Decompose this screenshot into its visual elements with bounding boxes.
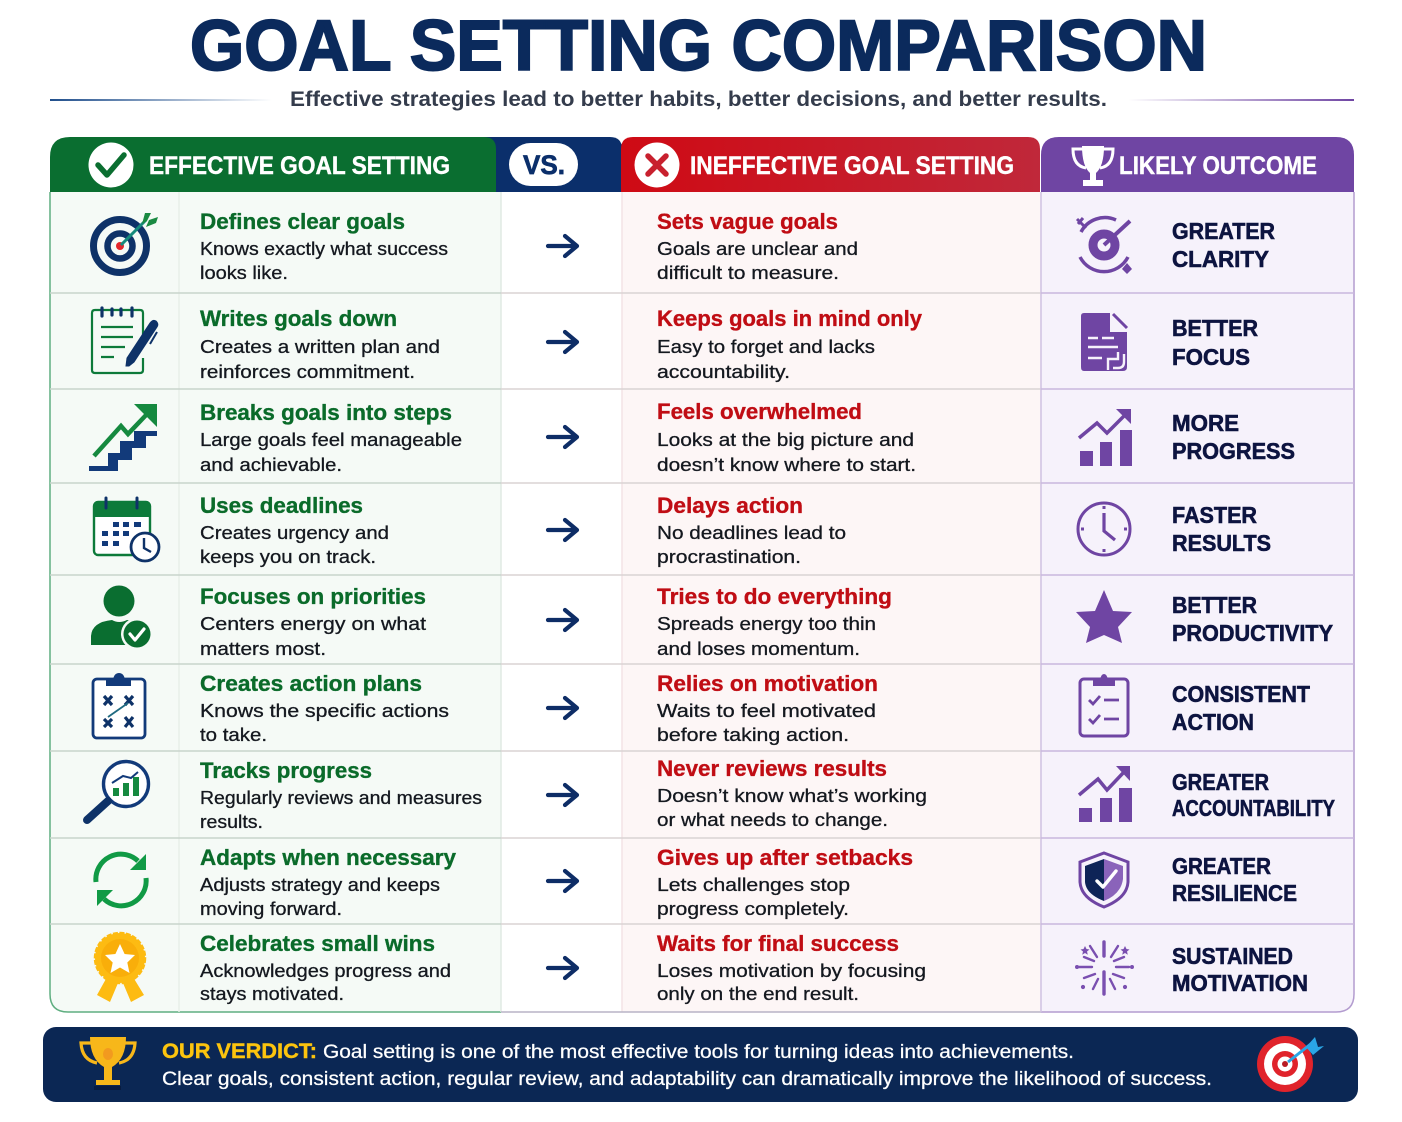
outcome 2: FOCUS <box>1172 344 1250 370</box>
row 5: priorities: Focuses on priorities <box>200 584 426 609</box>
row 9: wins: stays motivated. <box>200 983 344 1004</box>
row 5: priorities: Centers energy on what <box>200 613 426 634</box>
icon: clipboard play plan <box>93 673 145 738</box>
row 9 <box>657 931 926 1004</box>
green column header <box>50 137 496 192</box>
icon: notepad and pen <box>92 308 158 373</box>
row 1 <box>657 209 858 283</box>
icon: cycle arrows <box>96 854 146 906</box>
row 2: Keeps goals in mind only <box>657 306 922 331</box>
row 1: clear goals <box>94 209 448 283</box>
row 5: Spreads energy too thin <box>657 613 876 634</box>
panel: ineffective goal setting <box>501 137 1041 1012</box>
verdict banner <box>43 1027 1358 1102</box>
red column header <box>621 137 1040 192</box>
row 5: and loses momentum. <box>657 638 860 659</box>
icon: growth chart <box>1079 409 1132 466</box>
outcome 7 <box>1079 766 1335 822</box>
row 7: Doesn’t know what’s working <box>657 785 927 806</box>
row 3: Feels overwhelmed <box>657 399 862 424</box>
outcome 8: GREATER <box>1172 853 1271 879</box>
icon: white trophy <box>1073 146 1113 186</box>
row 1: clear goals: looks like. <box>200 262 288 283</box>
icon: shield <box>1080 853 1128 907</box>
row 3: steps: Large goals feel manageable <box>200 429 462 450</box>
row 9: wins <box>95 931 451 1004</box>
row 9: wins: Celebrates small wins <box>200 931 435 956</box>
row 6: action plans <box>93 671 449 745</box>
row 7: tracking: Regularly reviews and measures <box>200 787 482 808</box>
row 4: deadlines: Uses deadlines <box>200 493 363 518</box>
row 5: priorities <box>91 584 426 659</box>
outcome 2: BETTER <box>1172 315 1258 341</box>
outcome 3: PROGRESS <box>1172 438 1295 464</box>
purple column header <box>1041 137 1354 192</box>
row 8: adapts: moving forward. <box>200 898 342 919</box>
row 8: Gives up after setbacks <box>657 845 913 870</box>
outcome 3 <box>1079 409 1295 466</box>
row 3: steps: Breaks goals into steps <box>200 400 452 425</box>
row 9: Loses motivation by focusing <box>657 960 926 981</box>
icon: person with check <box>91 586 153 650</box>
row 2: accountability. <box>657 361 790 382</box>
title: GOAL SETTING COMPARISON <box>190 7 1207 86</box>
outcome 9: MOTIVATION <box>1172 970 1308 996</box>
verdict text <box>162 1040 1212 1090</box>
icon: growth chart <box>1079 766 1132 822</box>
outcome 1: GREATER <box>1172 218 1275 244</box>
green column header: EFFECTIVE GOAL SETTING <box>149 152 450 180</box>
verdict text: Goal setting is one of the most effective tools for turning ideas into achievements. <box>323 1042 1074 1063</box>
row 4: deadlines <box>94 493 389 567</box>
row 2: Easy to forget and lacks <box>657 336 875 357</box>
row 7: tracking <box>87 758 482 832</box>
row 4: Delays action <box>657 493 803 518</box>
row 1: clear goals: Knows exactly what success <box>200 238 448 259</box>
icon: star <box>1076 590 1132 643</box>
row 3: doesn’t know where to start. <box>657 454 916 475</box>
row 7: tracking: results. <box>200 811 263 832</box>
outcome 8: RESILIENCE <box>1172 880 1297 906</box>
row 2: write down: Writes goals down <box>200 306 397 331</box>
outcome 6: CONSISTENT <box>1172 681 1310 707</box>
row 4: No deadlines lead to <box>657 522 846 543</box>
icon: target <box>94 213 158 272</box>
row 6: action plans: Creates action plans <box>200 671 422 696</box>
icon: stairs with arrow <box>89 404 157 471</box>
outcome 4: FASTER <box>1172 502 1257 528</box>
outcome 5: PRODUCTIVITY <box>1172 620 1333 646</box>
arrows <box>548 236 577 978</box>
row 1: difficult to measure. <box>657 262 839 283</box>
row 5: priorities: matters most. <box>200 638 326 659</box>
row 7: or what needs to change. <box>657 809 888 830</box>
VS badge <box>509 143 578 186</box>
outcome 9: SUSTAINED <box>1172 943 1293 969</box>
icon: gold trophy <box>81 1037 135 1090</box>
icon: medal ribbon <box>95 933 145 1002</box>
row 7: tracking: Tracks progress <box>200 758 372 783</box>
row 4: deadlines: keeps you on track. <box>200 546 376 567</box>
outcome 6 <box>1080 674 1310 736</box>
row 3: steps: and achievable. <box>200 454 342 475</box>
row 2: write down: Creates a written plan and <box>200 336 440 357</box>
verdict text: OUR VERDICT: <box>162 1040 317 1063</box>
row 3: Looks at the big picture and <box>657 429 914 450</box>
row 6: action plans: to take. <box>200 724 267 745</box>
row 6 <box>657 671 878 745</box>
row 6: Relies on motivation <box>657 671 878 696</box>
icon: checklist clipboard <box>1080 674 1128 736</box>
icon: focus target <box>1077 218 1132 274</box>
row 8: adapts: Adapts when necessary <box>200 845 456 870</box>
row 9: wins: Acknowledges progress and <box>200 960 451 981</box>
row 2: write down: reinforces commitment. <box>200 361 415 382</box>
outcome 8 <box>1080 853 1297 907</box>
row 4: procrastination. <box>657 546 801 567</box>
outcome 1 <box>1077 218 1275 274</box>
icon: target with blue arrow <box>1257 1036 1324 1092</box>
outcome 1: CLARITY <box>1172 246 1269 272</box>
row 7: Never reviews results <box>657 756 887 781</box>
row 9: only on the end result. <box>657 983 859 1004</box>
outcome 7: GREATER <box>1172 769 1269 795</box>
VS badge: VS. <box>523 150 565 180</box>
icon: clock <box>1078 503 1130 555</box>
row 3 <box>657 399 916 475</box>
row 6: Waits to feel motivated <box>657 700 876 721</box>
row 4: deadlines: Creates urgency and <box>200 522 389 543</box>
red column header: INEFFECTIVE GOAL SETTING <box>690 152 1014 180</box>
row 2: write down <box>92 306 440 382</box>
icon: calendar with clock <box>94 498 159 561</box>
panel: VS column <box>480 137 622 1012</box>
outcome 5: BETTER <box>1172 592 1257 618</box>
outcome 4 <box>1078 502 1271 556</box>
row 6: before taking action. <box>657 724 849 745</box>
row 1: Sets vague goals <box>657 209 838 234</box>
row 1: clear goals: Defines clear goals <box>200 209 405 234</box>
outcome 7: ACCOUNTABILITY <box>1172 795 1335 821</box>
icon: document <box>1081 313 1127 371</box>
row 3: steps <box>89 400 462 475</box>
outcome 9 <box>1076 942 1308 996</box>
row 2 <box>657 306 922 382</box>
outcome 5 <box>1076 590 1333 646</box>
panel: effective goal setting <box>50 137 501 1012</box>
row 8: Lets challenges stop <box>657 874 850 895</box>
icon: fireworks <box>1076 942 1134 994</box>
row 9: Waits for final success <box>657 931 899 956</box>
icon: magnifier with chart <box>87 762 148 820</box>
subtitle: Effective strategies lead to better habits, better decisions, and better results. <box>290 88 1107 111</box>
row 5 <box>657 584 892 659</box>
row 5: Tries to do everything <box>657 584 892 609</box>
row 1: Goals are unclear and <box>657 238 858 259</box>
row 8: progress completely. <box>657 898 849 919</box>
row 7 <box>657 756 927 830</box>
outcome 4: RESULTS <box>1172 530 1271 556</box>
verdict text: Clear goals, consistent action, regular review, and adaptability can dramatically improve the likelihood of success. <box>162 1069 1212 1090</box>
outcome 6: ACTION <box>1172 709 1254 735</box>
row 8: adapts: Adjusts strategy and keeps <box>200 874 440 895</box>
row 8 <box>657 845 913 919</box>
purple column header: LIKELY OUTCOME <box>1119 152 1317 180</box>
outcome 2 <box>1081 313 1258 371</box>
outcome 3: MORE <box>1172 410 1239 436</box>
panel: likely outcome <box>1041 137 1354 1012</box>
row 4 <box>657 493 846 567</box>
row 6: action plans: Knows the specific actions <box>200 700 449 721</box>
row 8: adapts <box>96 845 456 919</box>
